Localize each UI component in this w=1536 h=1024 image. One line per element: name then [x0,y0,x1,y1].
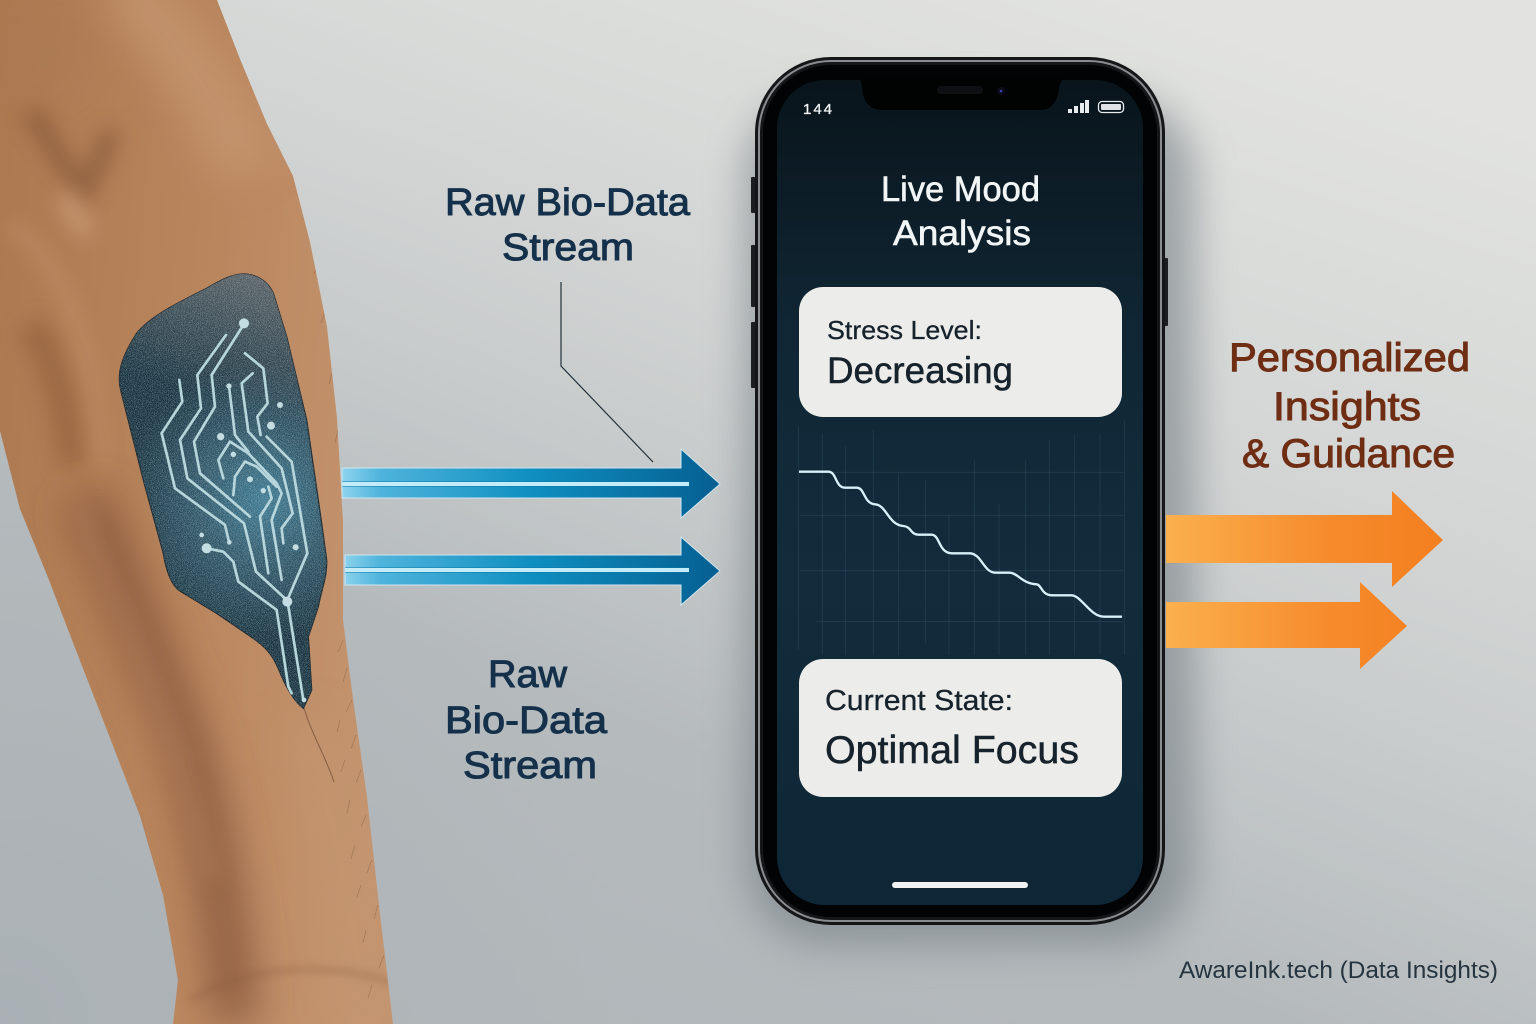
arrow: orange insight 1 [1166,491,1443,587]
card: stress level: Decreasing [827,350,1013,391]
side buttons [751,177,1168,388]
leader line to arrow [561,282,653,462]
heading: raw bio-data stream (top): Raw Bio-Data [445,182,691,224]
heading: personalized insights [1229,336,1470,476]
heading: raw bio-data stream (bottom) [445,654,608,787]
card: current state [799,659,1122,797]
circuit traces [162,324,307,700]
signal bars [1068,100,1089,113]
heading: raw bio-data stream (top): Stream [502,227,634,269]
arrow: orange insight 2 [1166,582,1407,669]
home indicator [892,882,1028,888]
arrow: blue data stream 2 [345,537,720,605]
phone body [755,57,1165,925]
heading: raw bio-data stream (bottom): Stream [463,745,597,787]
screen title: Live Mood [881,170,1040,209]
phone [751,57,1168,925]
credit: AwareInk.tech (Data Insights) [1179,957,1498,984]
card: current state: Current State: [825,685,1013,717]
notch [858,78,1064,110]
speaker [937,86,983,94]
forearm [0,0,420,1024]
camera [997,87,1005,95]
heading: raw bio-data stream (bottom): Raw [488,654,568,696]
card: stress level: Stress Level: [827,315,982,345]
chart grid [798,420,1124,655]
heading: personalized insights: & Guidance [1242,432,1455,476]
tattoo: circuit patch on arm [119,274,327,708]
chart: falling stress line [798,420,1124,655]
phone shadow [745,95,1195,945]
battery [1098,102,1124,112]
screen title: Analysis [893,214,1031,253]
trend line [799,472,1122,617]
screen title [881,170,1040,253]
card: current state: Optimal Focus [825,729,1079,772]
status time: 144 [803,101,832,118]
heading: raw bio-data stream (bottom): Bio-Data [445,700,608,742]
card: stress level [799,287,1122,417]
arrow: blue data stream 1 [342,449,720,518]
screen [777,80,1143,905]
heading: personalized insights: Personalized [1229,336,1470,380]
heading: personalized insights: Insights [1273,385,1421,429]
arm hairs [314,262,384,998]
heading: raw bio-data stream (top) [445,182,691,269]
